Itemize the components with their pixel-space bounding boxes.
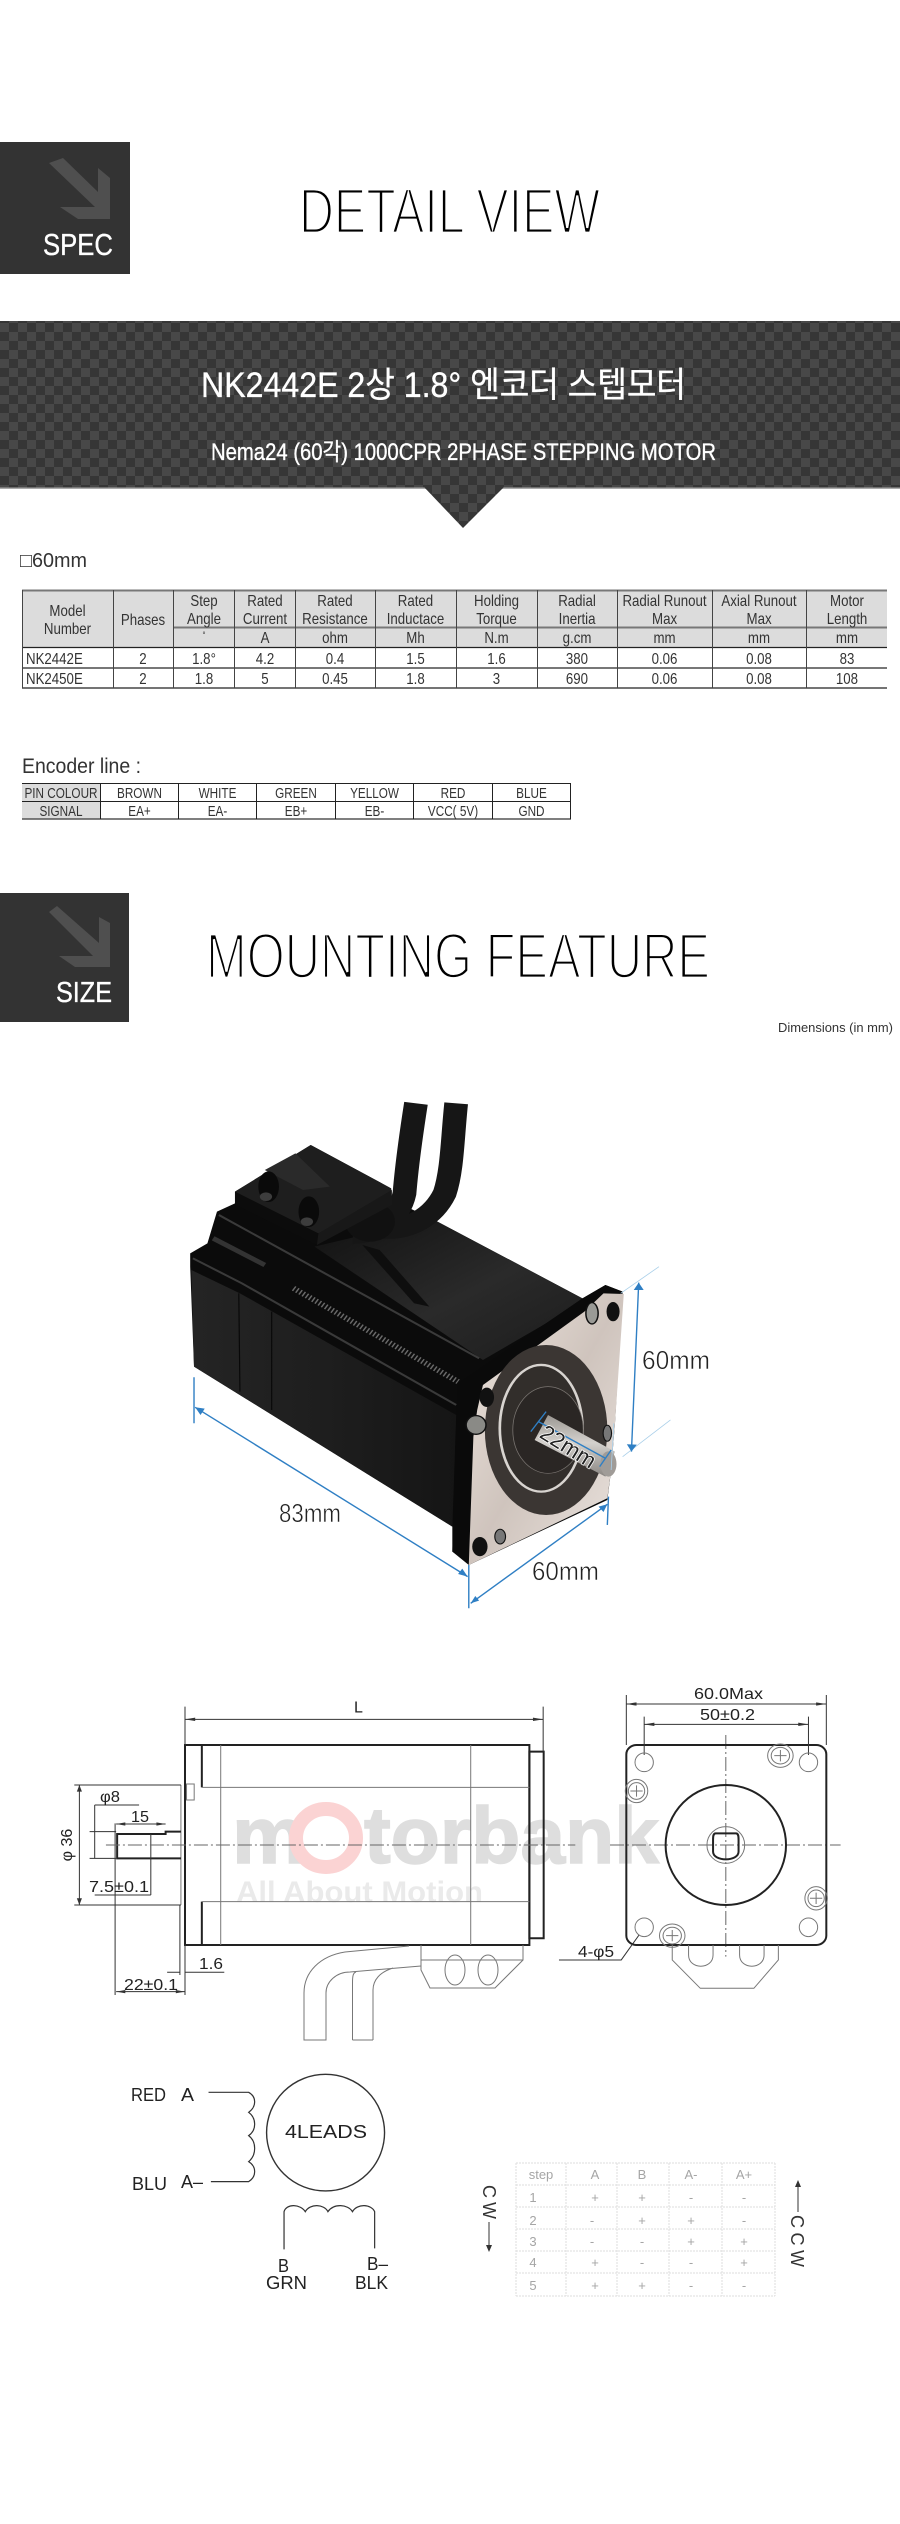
table: encoder pin signals: EB+ [285,803,308,819]
table: motor specifications: ohm [322,630,348,647]
table: motor specifications: Number [44,621,91,638]
table: step sequence [516,2163,775,2296]
wiring diagram: GRN [266,2273,307,2293]
encoder heading: Encoder line : [22,755,141,778]
table: motor specifications: Length [827,611,867,628]
technical drawing: front view [559,1695,827,1988]
table: step sequence: - [689,2278,693,2293]
SPEC label: SPEC [43,227,113,262]
table: motor specifications: Radial Runout [622,593,707,610]
center line [106,1735,841,1957]
table: motor specifications: 0.4 [326,651,344,668]
table: encoder pin signals: RED [441,785,465,801]
encoder connector block [235,1145,392,1233]
table: step sequence: A [591,2167,600,2182]
wiring diagram: A– [181,2172,203,2192]
table: motor specifications: mm [836,630,858,647]
table: motor specifications: Inertia [559,611,596,628]
table: motor specifications: Max [747,611,772,628]
table: motor specifications: 0.08 [746,651,772,668]
table: step sequence: - [742,2213,746,2228]
recessed disk [485,1345,607,1515]
table: motor specifications: 1.5 [406,651,425,668]
screws [625,1744,827,1947]
table: motor specifications: 1.6 [487,651,506,668]
table: motor specifications: Torque [476,611,517,628]
table: motor specifications: Angle [187,611,221,628]
drawing dimension labels: 60.0Max [694,1686,763,1703]
label: 60mm height: 60mm [642,1345,710,1375]
table: motor specifications: 4.2 [256,651,274,668]
table: step sequence: + [591,2278,599,2293]
drawing dimension labels: 4-φ5 [578,1944,614,1961]
table: motor specifications: 1.8 [195,671,213,688]
table: motor specifications: Max [652,611,678,628]
mounting holes [635,1753,653,1772]
shaft outline [117,1832,181,1858]
table: encoder pin signals: EA+ [128,803,151,819]
SIZE label: SIZE [56,977,112,1009]
table: step sequence: + [591,2190,599,2205]
icon: SIZE arrow [49,906,110,967]
dimension lines on photo [194,1267,670,1608]
badge: SIZE [0,893,129,1022]
label: 83mm: 83mm [279,1498,341,1528]
table: motor specifications [22,590,887,688]
table: encoder pin signals [22,783,571,819]
table: motor specifications: Holding [474,593,519,610]
body outline [185,1745,529,1945]
table: step sequence: A+ [736,2167,752,2182]
table: step sequence: + [687,2234,695,2249]
table: motor specifications: NK2442E [26,651,83,668]
table: step sequence: - [590,2234,594,2249]
table: motor specifications: Phases [121,612,165,629]
table: encoder pin signals: BLUE [516,785,547,801]
table: encoder pin signals: EA- [208,803,227,819]
top face [315,1218,582,1360]
table: step sequence: 5 [529,2278,537,2293]
table: step sequence: + [638,2190,646,2205]
frame size label: □60mm [20,550,87,572]
table: motor specifications: 0.06 [652,671,677,688]
table: motor specifications: Inductace [387,611,444,628]
wiring diagram: B– [367,2254,388,2274]
table: motor specifications: mm [653,630,676,647]
table: motor specifications: Motor [830,593,864,610]
table: step sequence: + [740,2255,748,2270]
table: motor specifications: 3 [493,671,500,688]
table: motor specifications: 2 [139,671,147,688]
wiring diagram: 4LEADS [285,2122,367,2142]
motor body silhouette [190,1145,623,1565]
table: step sequence: - [640,2234,644,2249]
motor shaft [535,1415,615,1477]
table: step sequence: + [687,2213,695,2228]
table: motor specifications: 690 [566,671,588,688]
table: motor specifications: Radial [558,593,596,610]
table: motor specifications: Rated [398,593,433,610]
table: step sequence: 4 [529,2255,537,2270]
drawing dimension labels: 22±0.1 [124,1977,178,1994]
table: motor specifications: 1.8° [192,651,216,668]
mounting holes [480,1388,494,1407]
table: step sequence: - [689,2190,693,2205]
table: step sequence: - [742,2190,746,2205]
table: motor specifications: Axial Runout [721,593,797,610]
coils and motor circle [209,2074,385,2249]
table: motor specifications: Current [243,611,287,628]
icon: SPEC arrow [49,158,110,219]
table: motor specifications: Step [190,593,218,610]
table: step sequence: 1 [529,2190,537,2205]
watermark: motorbank [232,1791,660,1909]
table: step sequence: 3 [529,2234,537,2249]
arrow: CW: CW [479,2185,499,2219]
wiring diagram: A [181,2085,194,2105]
table: step sequence: - [590,2213,594,2228]
table: step sequence: - [640,2255,644,2270]
badge: SPEC [0,142,130,274]
table: encoder pin signals: WHITE [199,785,237,801]
table: motor specifications: NK2450E [26,671,83,688]
motor photo illustration [190,1103,624,1565]
note: dimensions unit: Dimensions (in mm) [778,1021,893,1035]
table: motor specifications: Model [49,603,86,620]
table: motor specifications: g.cm [563,630,591,647]
technical drawing: side view [74,1707,841,1995]
drawing dimension labels [59,1686,763,1994]
table: motor specifications: N.m [484,630,509,647]
rear connector [672,1945,778,1988]
table: motor specifications: 83 [840,651,854,668]
table: encoder pin signals: PIN COLOUR [24,785,98,801]
table: motor specifications: 108 [836,671,858,688]
table: motor specifications: 2 [139,651,147,668]
rails and teeth [193,1215,479,1405]
table: step sequence: - [742,2278,746,2293]
drawing dimension labels: φ 36 [59,1829,76,1861]
product subtitle: Nema24 (60각) 1000CPR 2PHASE STEPPING MOTOR [211,439,716,466]
label: 22mm shaft: 22mm [536,1420,601,1473]
table: motor specifications: Rated [317,593,353,610]
drawing dimension labels: 15 [131,1809,149,1826]
drawing dimension labels: L [354,1700,363,1716]
flange frame [452,1285,623,1563]
drawing dimension labels: 50±0.2 [700,1707,755,1724]
table: step sequence: B [638,2167,646,2182]
table: step sequence: step [529,2167,553,2182]
table: motor specifications: 0.45 [322,671,348,688]
banner: product title [0,321,900,528]
watermark: motorbank: m [232,1791,306,1880]
product title: NK2442E 2상 1.8° 엔코더 스텝모터 [201,366,686,405]
drawing dimension labels: φ8 [100,1789,120,1806]
screws [466,1416,486,1434]
arrow: CW [479,2185,499,2252]
side face [191,1270,456,1527]
table: motor specifications: Mh [406,630,425,647]
watermark: motorbank: torbank [364,1791,660,1880]
label: 60mm width: 60mm [532,1556,599,1586]
table: motor specifications: mm [748,630,770,647]
wiring diagram [131,2074,388,2293]
table: motor specifications: 5 [261,671,269,688]
table: motor specifications: ° [203,630,205,640]
table: step sequence: + [740,2234,748,2249]
table: encoder pin signals: SIGNAL [39,803,83,819]
table: step sequence: - [689,2255,693,2270]
table: motor specifications: 0.06 [652,651,677,668]
table: motor specifications: A [261,630,270,647]
table: encoder pin signals: VCC( 5V) [428,803,478,819]
table: motor specifications: 380 [566,651,588,668]
table: motor specifications: 1.8 [406,671,425,688]
table: encoder pin signals: GREEN [275,785,317,801]
technical drawing: side connector and cables [304,1945,523,2040]
table: motor specifications: Rated [247,593,283,610]
central boss and shaft [666,1785,786,1905]
wiring diagram: BLK [355,2273,388,2293]
cables [353,1103,456,1233]
heading: DETAIL VIEW: DETAIL VIEW [299,175,600,247]
arrow: CCW: CCW [787,2215,807,2267]
silver face plate [469,1293,624,1565]
table: encoder pin signals: BROWN [117,785,162,801]
dimension lines [74,1707,543,1995]
table: step sequence: A- [684,2167,698,2182]
drawing dimension labels: 1.6 [199,1956,223,1973]
table: motor specifications: 0.08 [746,671,772,688]
table: step sequence: + [591,2255,599,2270]
table: encoder pin signals: YELLOW [350,785,400,801]
table: encoder pin signals: EB- [365,803,384,819]
wiring diagram: BLU [132,2174,167,2194]
table: step sequence: + [638,2278,646,2293]
drawing dimension labels: 7.5±0.1 [89,1879,149,1896]
wire labels: RED [131,2085,166,2105]
wiring diagram: B [278,2256,289,2276]
table: step sequence: 2 [529,2213,537,2228]
cable boss [345,1202,395,1242]
watermark tagline: All About Motion [236,1876,483,1909]
table: step sequence: + [638,2213,646,2228]
table: encoder pin signals: GND [518,803,545,819]
table: motor specifications: Resistance [302,611,368,628]
arrow: CCW [787,2180,807,2267]
heading: MOUNTING FEATURE: MOUNTING FEATURE [206,920,710,992]
